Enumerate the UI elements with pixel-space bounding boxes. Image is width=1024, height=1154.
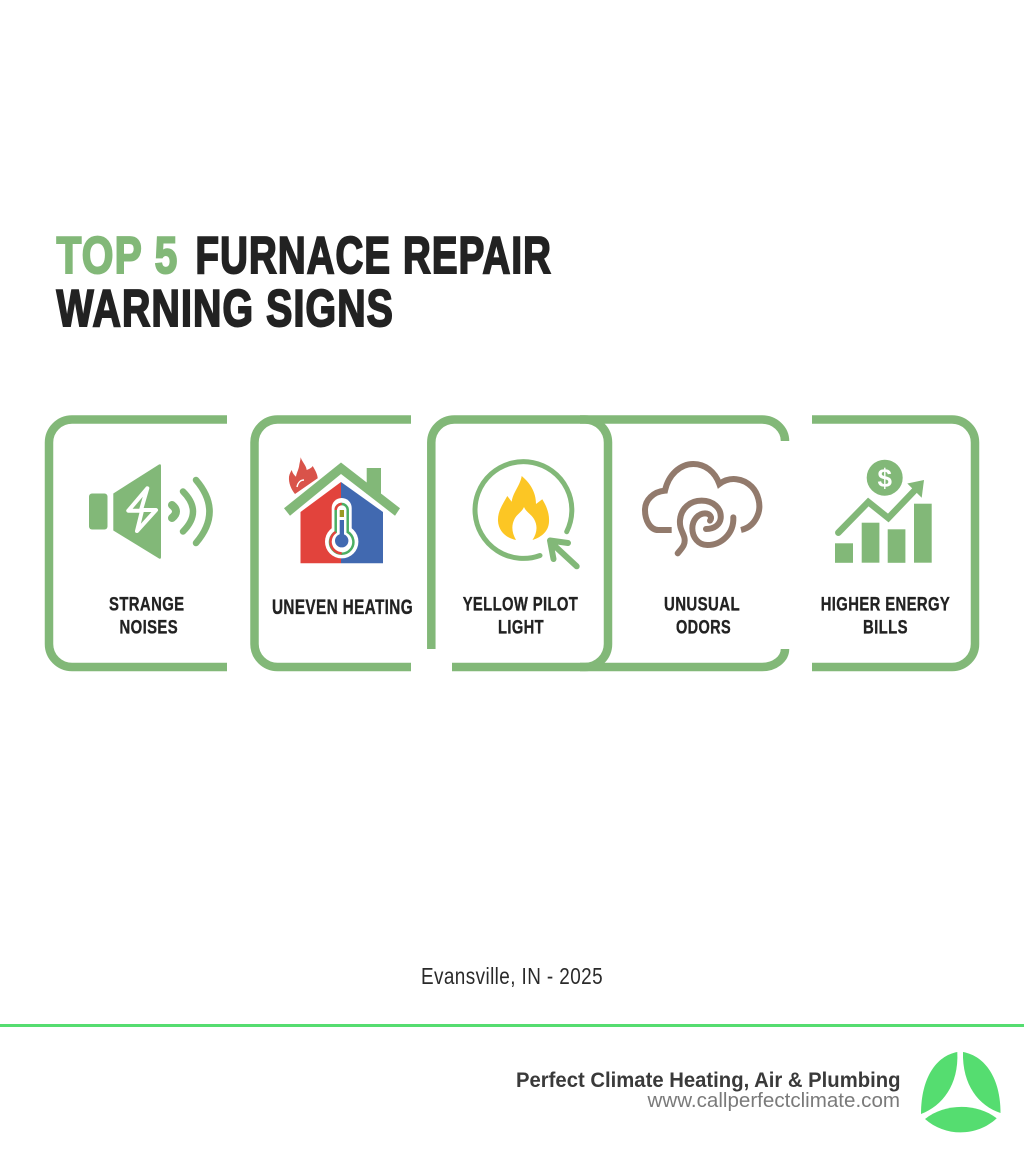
label: strange noises: STRANGE	[109, 594, 184, 616]
label: yellow pilot light	[463, 594, 578, 638]
card frame: yellow pilot light	[431, 420, 608, 667]
card frame: uneven heating	[254, 420, 411, 667]
label: higher energy bills: BILLS	[863, 616, 908, 638]
label: uneven heating: UNEVEN HEATING	[272, 596, 413, 619]
title: FURNACE REPAIR	[196, 227, 552, 285]
panel: higher energy bills	[812, 420, 975, 667]
icon: rising bar chart with dollar coin: $	[877, 463, 892, 493]
label: yellow pilot light: YELLOW PILOT	[463, 594, 578, 616]
label: strange noises: NOISES	[120, 616, 178, 638]
card frame: unusual odors	[580, 420, 785, 667]
card frame: higher energy bills	[812, 420, 975, 667]
label: strange noises	[109, 594, 184, 638]
footer rule	[0, 1024, 1024, 1027]
label: unusual odors	[664, 594, 740, 638]
icon: house with thermometer	[284, 457, 400, 563]
icon: rising bar chart with dollar coin	[835, 460, 932, 563]
title: WARNING SIGNS	[56, 280, 394, 338]
label: unusual odors: ODORS	[676, 616, 731, 638]
panel: strange noises	[49, 420, 227, 667]
label: yellow pilot light: LIGHT	[498, 616, 544, 638]
location and year: Evansville, IN - 2025	[421, 963, 603, 989]
title	[56, 227, 552, 338]
label: higher energy bills	[821, 594, 950, 638]
icon: speaker with sound waves	[89, 464, 210, 559]
title: TOP 5	[56, 227, 178, 285]
icon: cloud with odor swirl	[645, 464, 759, 553]
panel: unusual odors	[580, 420, 785, 667]
panel: uneven heating	[254, 420, 413, 667]
panel: yellow pilot light	[431, 420, 608, 667]
company name: Perfect Climate Heating, Air & Plumbing	[516, 1069, 900, 1092]
label: unusual odors: UNUSUAL	[664, 594, 740, 616]
logo	[921, 1052, 1000, 1132]
label: higher energy bills: HIGHER ENERGY	[821, 594, 950, 616]
card frame: strange noises	[49, 420, 227, 667]
website: www.callperfectclimate.com	[646, 1089, 900, 1112]
icon: pilot flame with arrow	[475, 462, 577, 566]
